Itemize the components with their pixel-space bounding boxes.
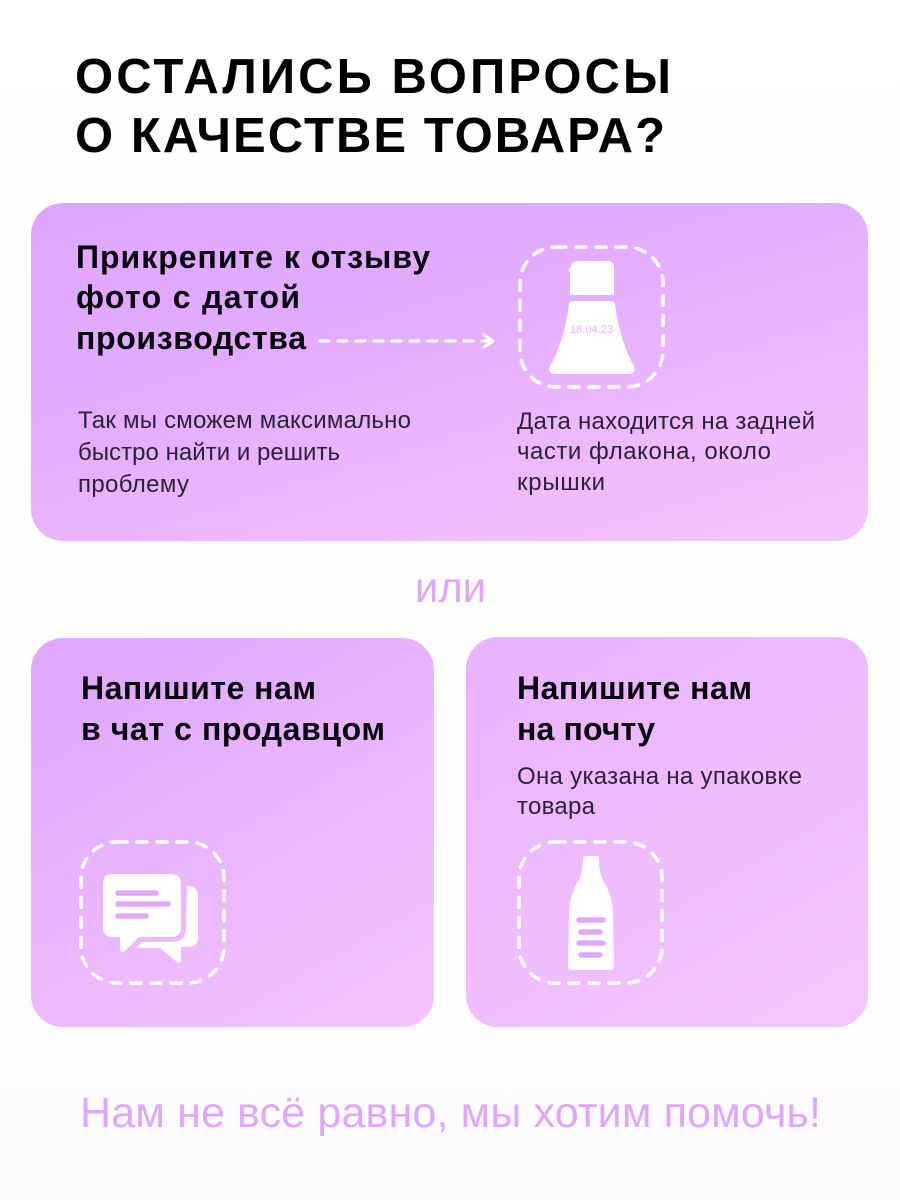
text: email location: товара	[517, 793, 596, 820]
text: email location: Она указана на упаковке	[517, 763, 802, 790]
text: why: проблему	[78, 471, 189, 498]
panel: attach photo	[31, 203, 868, 541]
panel: seller chat	[31, 638, 434, 1027]
heading: seller chat: в чат с продавцом	[81, 711, 385, 747]
icon: bottle with date: 18.04.23	[570, 324, 613, 336]
heading: attach photo: фото с датой	[76, 279, 300, 315]
text: why: Так мы сможем максимально	[78, 407, 411, 434]
text: why	[78, 407, 411, 498]
heading: seller chat	[81, 670, 385, 747]
text: why: быстро найти и решить	[78, 439, 340, 466]
text: date location: части флакона, около	[517, 438, 771, 465]
closing message: Нам не всё равно, мы хотим помочь!	[80, 1089, 821, 1137]
separator word: или	[415, 564, 486, 612]
icon: bottle with date	[520, 247, 663, 387]
title	[75, 50, 671, 163]
icon: chat bubbles	[81, 842, 224, 983]
heading: seller chat: Напишите нам	[81, 670, 316, 706]
heading: attach photo	[76, 239, 430, 356]
arrow	[320, 335, 493, 347]
title: О КАЧЕСТВЕ ТОВАРА?	[75, 109, 665, 163]
text: date location: крышки	[517, 469, 605, 496]
heading: email	[517, 670, 752, 747]
heading: email: на почту	[517, 711, 655, 747]
heading: attach photo: производства	[76, 320, 306, 356]
text: date location: Дата находится на задней	[517, 408, 815, 435]
heading: email: Напишите нам	[517, 670, 752, 706]
heading: attach photo: Прикрепите к отзыву	[76, 239, 430, 275]
icon: bottle with label	[519, 842, 662, 983]
title: ОСТАЛИСЬ ВОПРОСЫ	[75, 50, 671, 104]
panel: email	[466, 637, 868, 1027]
text: date location	[517, 408, 815, 496]
text: email location	[517, 763, 802, 820]
